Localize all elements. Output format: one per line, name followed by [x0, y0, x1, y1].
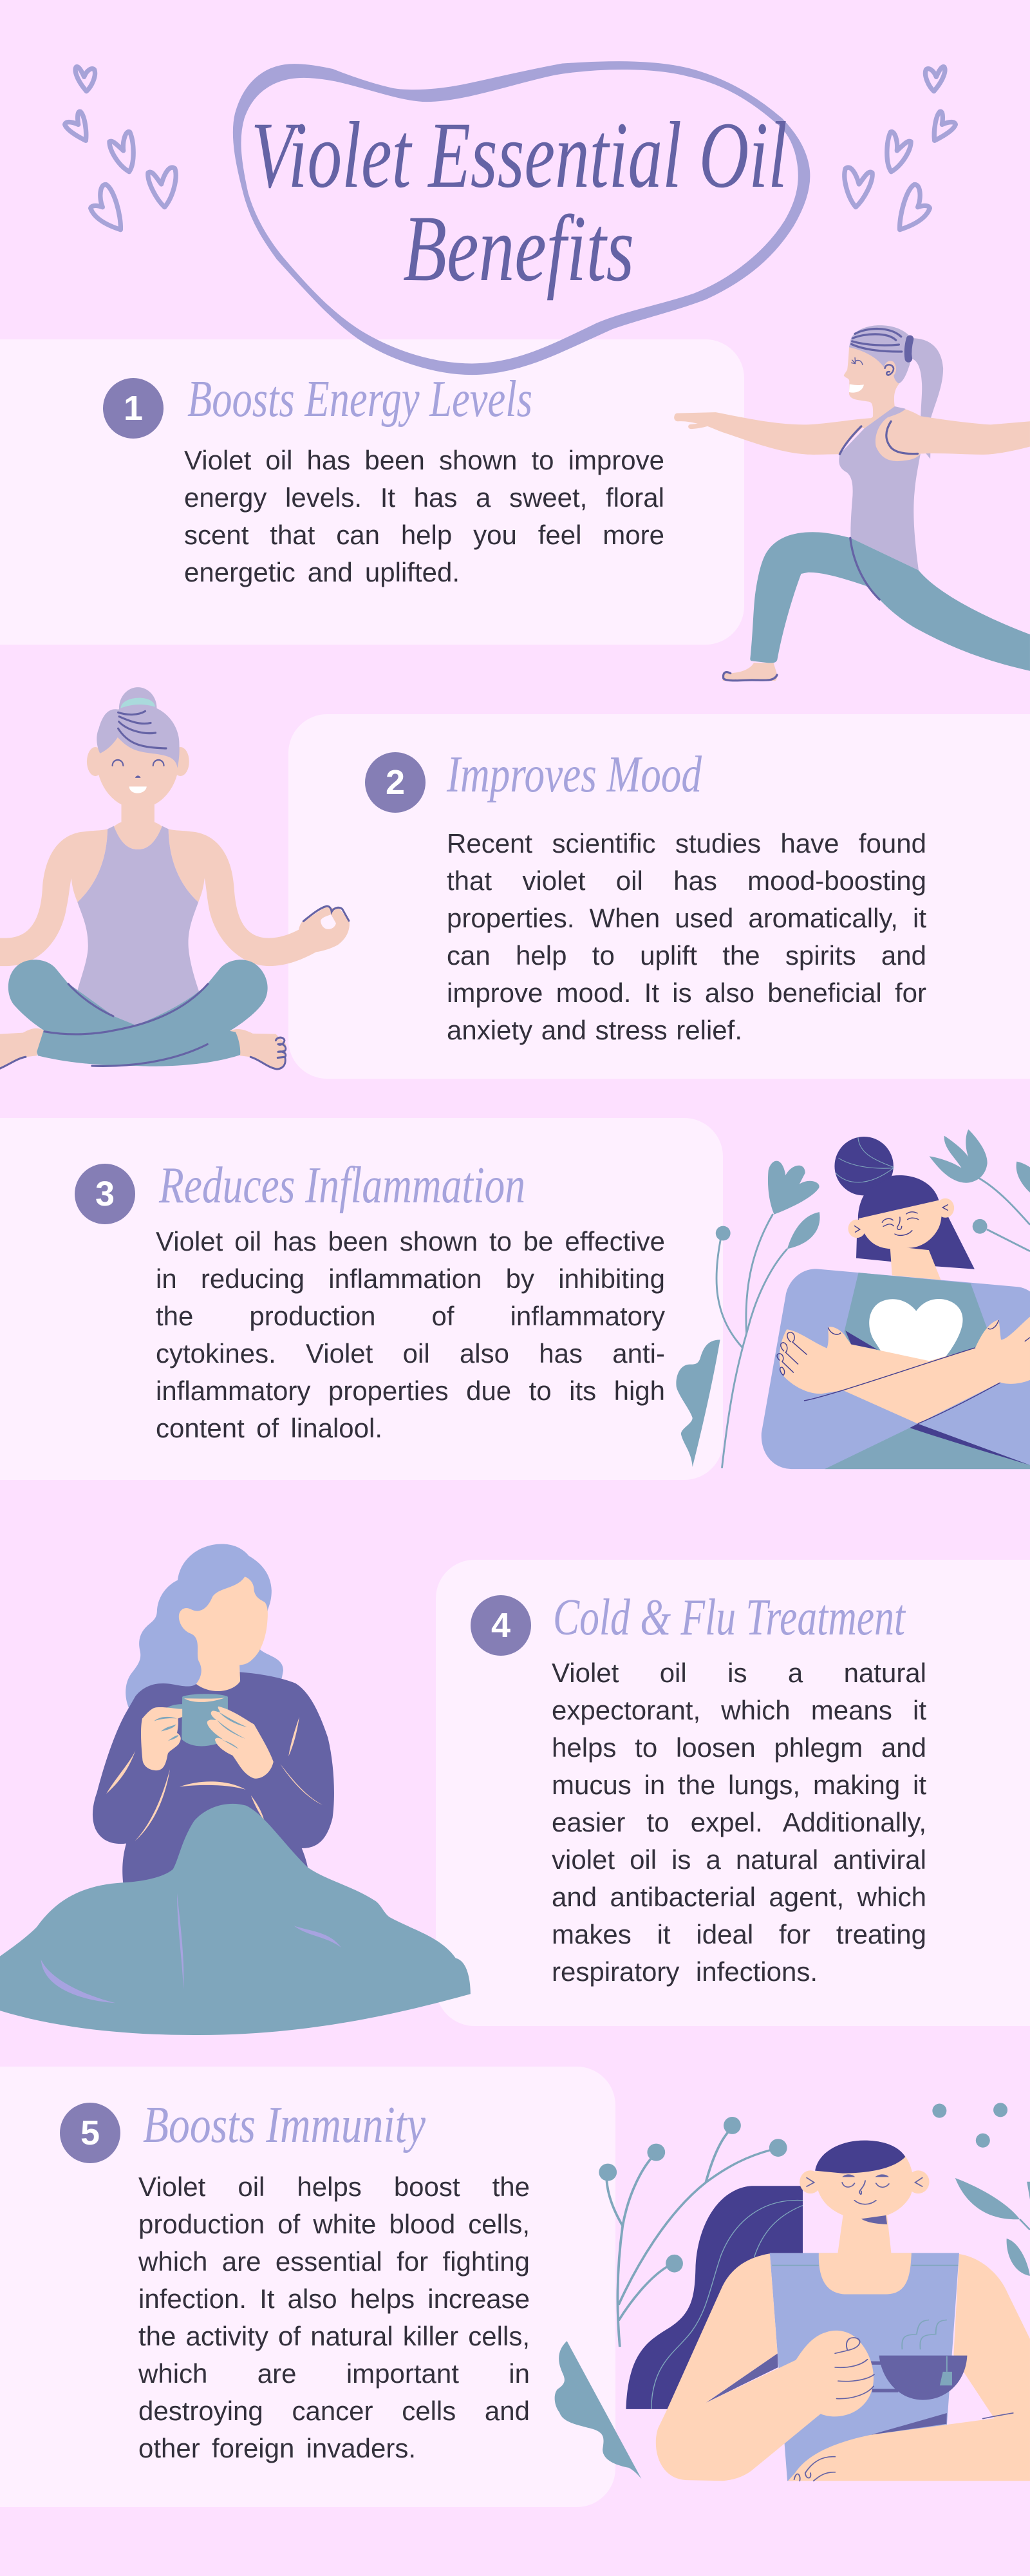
text block: energy: energy levels. It has a sweet, floral	[184, 482, 664, 513]
text block: mood: Recent scientific studies have found	[447, 828, 926, 858]
hair back	[626, 2186, 803, 2409]
text block: immunity: which are essential for fighting	[138, 2246, 530, 2277]
text block: immunity: which are important in	[138, 2358, 530, 2389]
text block: inflammation: Violet oil has been shown to be effective	[156, 1226, 665, 1256]
text block: energy: Violet oil has been shown to improve	[184, 445, 664, 475]
text block: immunity: production of white blood cells,	[138, 2209, 530, 2239]
white heart	[869, 1299, 963, 1361]
text block: immunity: Violet oil helps boost the	[138, 2172, 530, 2202]
hands	[141, 1707, 182, 1770]
text block: energy: scent that can help you feel more	[184, 520, 664, 550]
plants	[676, 1130, 1030, 1467]
number badge 5	[60, 2103, 120, 2163]
illustration: woman in warrior yoga pose	[674, 325, 1030, 681]
number badge 1	[103, 378, 164, 439]
thigh	[788, 2410, 1030, 2481]
text block: inflammation: inflammatory properties due to its high	[156, 1376, 665, 1406]
number badge 2: 2	[386, 763, 405, 802]
tea cup	[869, 2362, 881, 2365]
sweater creases	[106, 1717, 323, 1841]
icon: hearts left	[65, 67, 176, 230]
icon: hearts right	[845, 67, 955, 230]
heading: reduces inflammation: Reduces Inflammation	[158, 1157, 525, 1214]
blanket	[0, 1804, 471, 2035]
text block: mood: that violet oil has mood-boosting	[447, 866, 926, 896]
text block: energy: energetic and uplifted.	[184, 557, 460, 587]
text block: cold and flu	[552, 1658, 926, 1987]
text block: mood: anxiety and stress relief.	[447, 1015, 742, 1045]
text block: immunity: destroying cancer cells and	[138, 2396, 530, 2426]
text block: cold and flu: helps to loosen phlegm and	[552, 1732, 926, 1763]
text block: cold and flu: makes it ideal for treating	[552, 1919, 926, 1949]
title: Benefits	[403, 196, 634, 301]
number badge 4: 4	[491, 1606, 510, 1645]
illustration: woman meditating cross-legged	[0, 687, 350, 1070]
text block: immunity: infection. It also helps increase	[138, 2284, 530, 2314]
heading: boosts energy levels: Boosts Energy Levels	[187, 371, 532, 428]
tank top	[770, 2253, 959, 2481]
mug	[165, 1704, 182, 1710]
text block: immunity	[138, 2172, 530, 2463]
number badge 4	[471, 1595, 531, 1656]
illustration: woman with tea cup and plants	[555, 2103, 1030, 2481]
hair and bun	[834, 1137, 894, 1195]
text block: mood: properties. When used aromatically, it	[447, 903, 926, 933]
number badge 3	[75, 1164, 135, 1224]
number badge 5: 5	[80, 2114, 100, 2152]
text block: inflammation: content of linalool.	[156, 1413, 382, 1443]
plants and dots	[606, 2131, 1030, 2347]
heading: cold and flu treatment: Cold & Flu Treatment	[553, 1589, 906, 1646]
title: Violet Essential Oil	[251, 102, 787, 207]
heading: improves mood: Improves Mood	[446, 746, 702, 803]
text block: inflammation: in reducing inflammation by inhibiting	[156, 1264, 665, 1294]
panel: boosts energy levels	[0, 339, 744, 645]
panel: reduces inflammation	[0, 1118, 723, 1480]
text block: mood: improve mood. It is also beneficial for	[447, 978, 926, 1008]
text block: energy	[184, 445, 664, 587]
right arm	[953, 2254, 1030, 2429]
text block: inflammation: cytokines. Violet oil also has anti-	[156, 1338, 665, 1368]
number badge 1: 1	[124, 389, 143, 428]
text block: cold and flu: violet oil is a natural antiviral	[552, 1844, 926, 1875]
top and shirt	[762, 1269, 1030, 1469]
left arm and fist	[656, 2253, 874, 2481]
number badge 2	[365, 752, 426, 813]
text block: mood: can help to uplift the spirits and	[447, 940, 926, 971]
face and neck	[848, 1220, 866, 1238]
text block: cold and flu: easier to expel. Additionally,	[552, 1807, 926, 1837]
number badge 3: 3	[95, 1175, 115, 1213]
shadow hatching	[706, 2353, 778, 2403]
title blob outline	[234, 62, 809, 374]
text block: inflammation	[156, 1226, 665, 1443]
text block: cold and flu: and antibacterial agent, which	[552, 1882, 926, 1912]
text block: cold and flu: expectorant, which means it	[552, 1695, 926, 1725]
heading: boosts immunity: Boosts Immunity	[143, 2097, 426, 2154]
illustration: woman hugging herself with heart and plants	[676, 1130, 1030, 1469]
illustration: woman under blanket holding mug	[0, 1544, 471, 2035]
title	[251, 102, 787, 301]
neck and head	[838, 2213, 892, 2255]
text block: cold and flu: Violet oil is a natural	[552, 1658, 926, 1688]
text block: cold and flu: mucus in the lungs, making it	[552, 1770, 926, 1800]
panel: boosts immunity	[0, 2067, 615, 2507]
text block: inflammation: the production of inflammatory	[156, 1301, 665, 1331]
text block: immunity: other foreign invaders.	[138, 2433, 416, 2463]
panel: improves mood	[288, 714, 1030, 1079]
text block: cold and flu: respiratory infections.	[552, 1956, 818, 1987]
panel: cold and flu treatment	[436, 1560, 1030, 2026]
crossed arms	[780, 1317, 1030, 1424]
text block: mood	[447, 828, 926, 1045]
text block: immunity: the activity of natural killer cells,	[138, 2321, 530, 2351]
